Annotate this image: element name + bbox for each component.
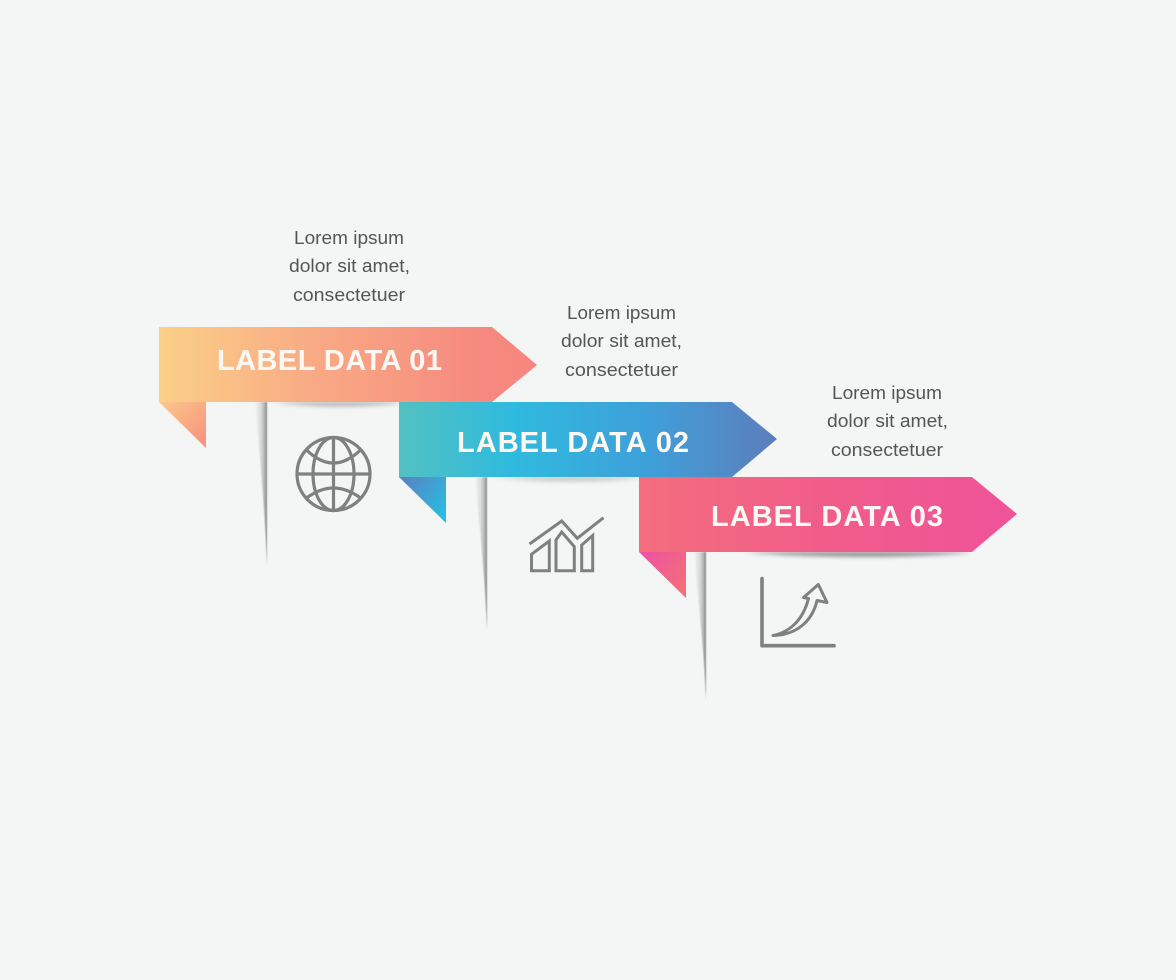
ribbon fold 1 <box>159 402 206 448</box>
label 1: LABEL DATA 01 <box>217 345 442 377</box>
text block 3: Lorem ipsum <box>832 383 942 403</box>
label 3: LABEL DATA 03 <box>711 501 943 533</box>
text block 1: consectetuer <box>293 285 405 305</box>
arrow banner 1 <box>159 327 537 402</box>
text block 1: Lorem ipsum <box>294 228 404 248</box>
text block 1 <box>289 228 410 305</box>
icon: globe <box>297 438 370 510</box>
label 2: LABEL DATA 02 <box>457 427 689 459</box>
arrow banner 2 <box>399 402 777 477</box>
shadows: step 1 <box>255 402 400 565</box>
shadows: step 2 <box>475 477 640 630</box>
icon: bar chart with trend line <box>530 518 604 571</box>
text block 2: dolor sit amet, <box>561 331 682 351</box>
text block 3: consectetuer <box>831 440 943 460</box>
arrow banner 3 <box>639 477 1017 552</box>
ribbon fold 2 <box>399 477 446 523</box>
text block 2 <box>561 303 682 380</box>
ribbon fold 3 <box>639 552 686 598</box>
text block 3: dolor sit amet, <box>827 411 948 431</box>
text block 3 <box>827 383 948 460</box>
text block 2: consectetuer <box>565 360 678 380</box>
shadows: step 3 <box>694 552 972 700</box>
icon: growth arrow on axes <box>762 578 834 646</box>
text block 2: Lorem ipsum <box>567 303 676 323</box>
text block 1: dolor sit amet, <box>289 256 410 276</box>
